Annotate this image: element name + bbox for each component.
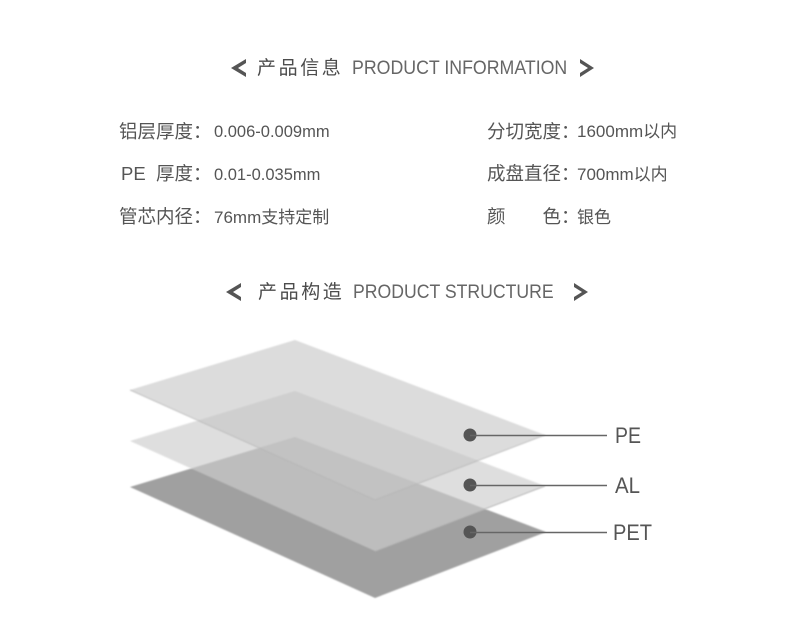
- heading english text: PRODUCT INFORMATION: [352, 57, 567, 79]
- icon: left chevron: [231, 59, 246, 77]
- layer: PET: [130, 437, 546, 598]
- spec: PE thickness: PE 厚度：: [121, 163, 211, 184]
- value: slit width: 1600mm以内: [577, 122, 677, 141]
- heading english text: PRODUCT STRUCTURE: [353, 281, 554, 303]
- spec: aluminium thickness: 铝层厚度：: [119, 121, 212, 142]
- spec: roll diameter: 成盘直径：: [487, 163, 580, 184]
- callout: PE: [464, 423, 641, 448]
- callout: AL: [464, 473, 640, 498]
- value: aluminium thickness: 0.006-0.009mm: [214, 123, 330, 141]
- heading chinese text: 产品构造: [258, 282, 344, 303]
- spec: core diameter: 管芯内径：: [119, 206, 212, 227]
- panel: product specifications: [119, 121, 677, 227]
- layer: PE: [130, 340, 545, 500]
- heading chinese text: 产品信息: [257, 58, 343, 79]
- value: roll diameter: 700mm以内: [577, 165, 668, 184]
- value: core diameter: 76mm支持定制: [214, 208, 329, 227]
- heading: product information: [231, 57, 594, 79]
- callout: PET: [464, 520, 652, 545]
- value: PE thickness: 0.01-0.035mm: [214, 166, 320, 184]
- layer: AL: [130, 391, 545, 551]
- icon: right chevron: [574, 283, 588, 301]
- spec: colour: 颜 色：: [487, 206, 580, 227]
- spec: slit width: 分切宽度：: [487, 121, 580, 142]
- icon: right chevron: [580, 59, 594, 77]
- value: colour: 银色: [577, 208, 611, 227]
- icon: left chevron: [226, 283, 241, 301]
- callout: AL: AL: [615, 473, 640, 498]
- heading: product structure: [226, 281, 588, 303]
- callout: PE: PE: [615, 423, 641, 448]
- callout: PET: PET: [613, 520, 652, 545]
